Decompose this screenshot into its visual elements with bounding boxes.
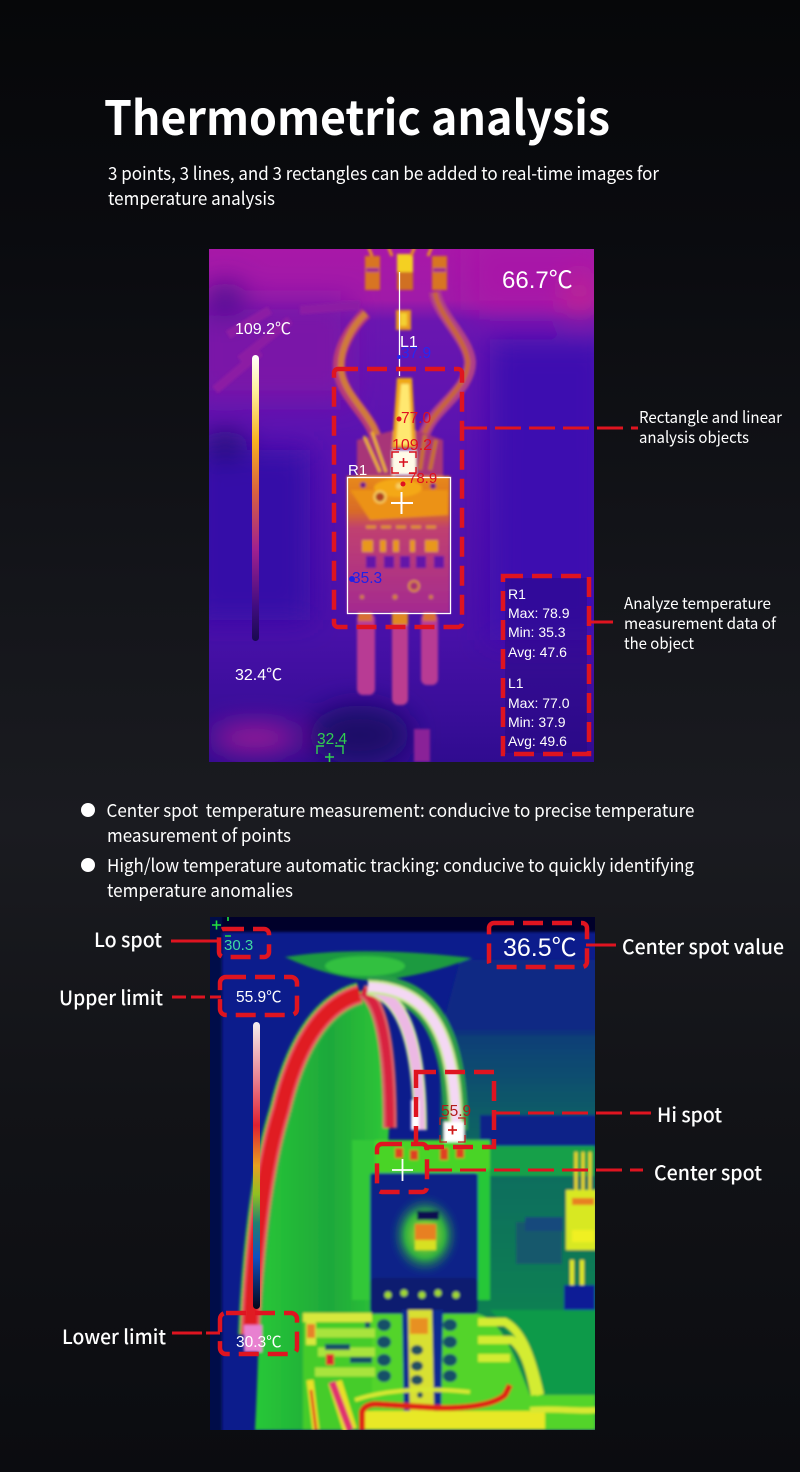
callout: temperature data [589,590,777,654]
lower wires [365,1411,545,1429]
callout: rectangle and linear analysis objects [461,404,783,448]
centre temperature: 36.5℃ [503,934,577,962]
line L1: L1 [400,334,418,351]
top band strips [215,305,360,390]
thermal image: contactor [209,249,594,762]
callout: Lower limit: Lower limit [62,1321,166,1350]
contactor body [347,476,450,613]
terminal field [303,1313,372,1430]
shoulder [357,430,395,476]
centre crosshair [391,492,413,514]
low spot marker: 32.4 [317,731,348,748]
intro text [108,160,660,211]
right wires [576,1152,590,1190]
bullet 1 [81,797,695,848]
bullet 2 [81,852,694,903]
measurement data panel: R1 [508,586,526,602]
bullet 2: High/low temperature automatic tracking: conducive to quickly identifying [107,852,694,878]
low spot marker [212,917,253,954]
line L1: 37.9 [401,345,431,362]
callout: temperature data: the object [624,630,694,654]
rectangle R1: 78.9 [408,470,437,487]
measurement data panel: Max: 77.0 [508,695,570,711]
callout: Upper limit: Upper limit [59,982,163,1011]
callout: temperature data: Analyze temperature [624,590,771,614]
scale max: 109.2℃ [235,321,291,338]
rectangle R1: R1 [348,462,367,479]
hot spot marker: 109.2 [392,437,432,454]
thermal scene [205,910,600,1440]
green arch [255,990,390,1430]
low spot marker [317,731,348,762]
cable halo [250,994,360,1335]
top ellipse [285,951,472,981]
callout: rectangle and linear analysis objects: analysis objects [639,424,749,448]
scale max: 55.9℃ [236,989,282,1006]
scale min: 32.4℃ [235,667,282,684]
intro text: 3 points, 3 lines, and 3 rectangles can be added to real-time images for [108,160,660,186]
callout: rectangle and linear analysis objects: Rectangle and linear [639,404,783,428]
bullet list [81,797,695,903]
curved bus bars [332,308,382,438]
measurement data panel: Max: 78.9 [508,605,570,621]
colour scale [252,355,259,641]
callout: Hi spot: Hi spot [657,1099,722,1128]
rectangle R1 [348,462,450,614]
centre bar [392,378,416,448]
hot spot marker [392,437,432,473]
line L1: 77.0 [401,410,432,427]
rectangle R1: 35.3 [352,570,382,587]
highlight boxes [219,923,587,1354]
intro text: temperature analysis [108,185,275,211]
callout: Lo spot: Lo spot [94,924,162,953]
centre temperature: 66.7℃ [502,267,573,294]
measurement data panel [505,578,587,753]
scale min: 30.3℃ [236,1334,282,1351]
bullet 1: measurement of points [107,822,291,848]
bullet 1: Center spot temperature measurement: conducive to precise temperature [106,797,695,823]
highlight box: data panel [503,576,589,754]
line L1 [396,272,432,427]
colour scale [253,1022,260,1309]
hot spot marker [440,1103,471,1142]
inverter body [368,1171,480,1282]
measurement data panel: L1 [508,675,524,691]
cable end [244,1325,262,1352]
cables [250,994,360,1335]
right panel [440,1030,600,1430]
callout: Lo spot [94,924,217,953]
centre crosshair [392,1159,413,1181]
callout: Center spot: Center spot [654,1157,762,1186]
measurement data panel: Avg: 47.6 [508,644,567,660]
hot spot marker: 55.9 [441,1103,471,1120]
terminals top [365,256,380,290]
callout: Center spot value: Center spot value [622,931,784,960]
thermal image: inverter cabinet [205,910,600,1440]
thermal scene [209,249,594,762]
legs [357,613,375,695]
low spot marker: 30.3 [224,937,253,954]
callout: temperature data: measurement data of [624,610,777,634]
measurement data panel: Min: 37.9 [508,714,566,730]
measurement data panel: Avg: 49.6 [508,733,567,749]
title: Thermometric analysis [104,80,610,149]
highlight box: analysis objects [334,369,462,627]
bullet 2: temperature anomalies [107,877,293,903]
measurement data panel: Min: 35.3 [508,624,566,640]
